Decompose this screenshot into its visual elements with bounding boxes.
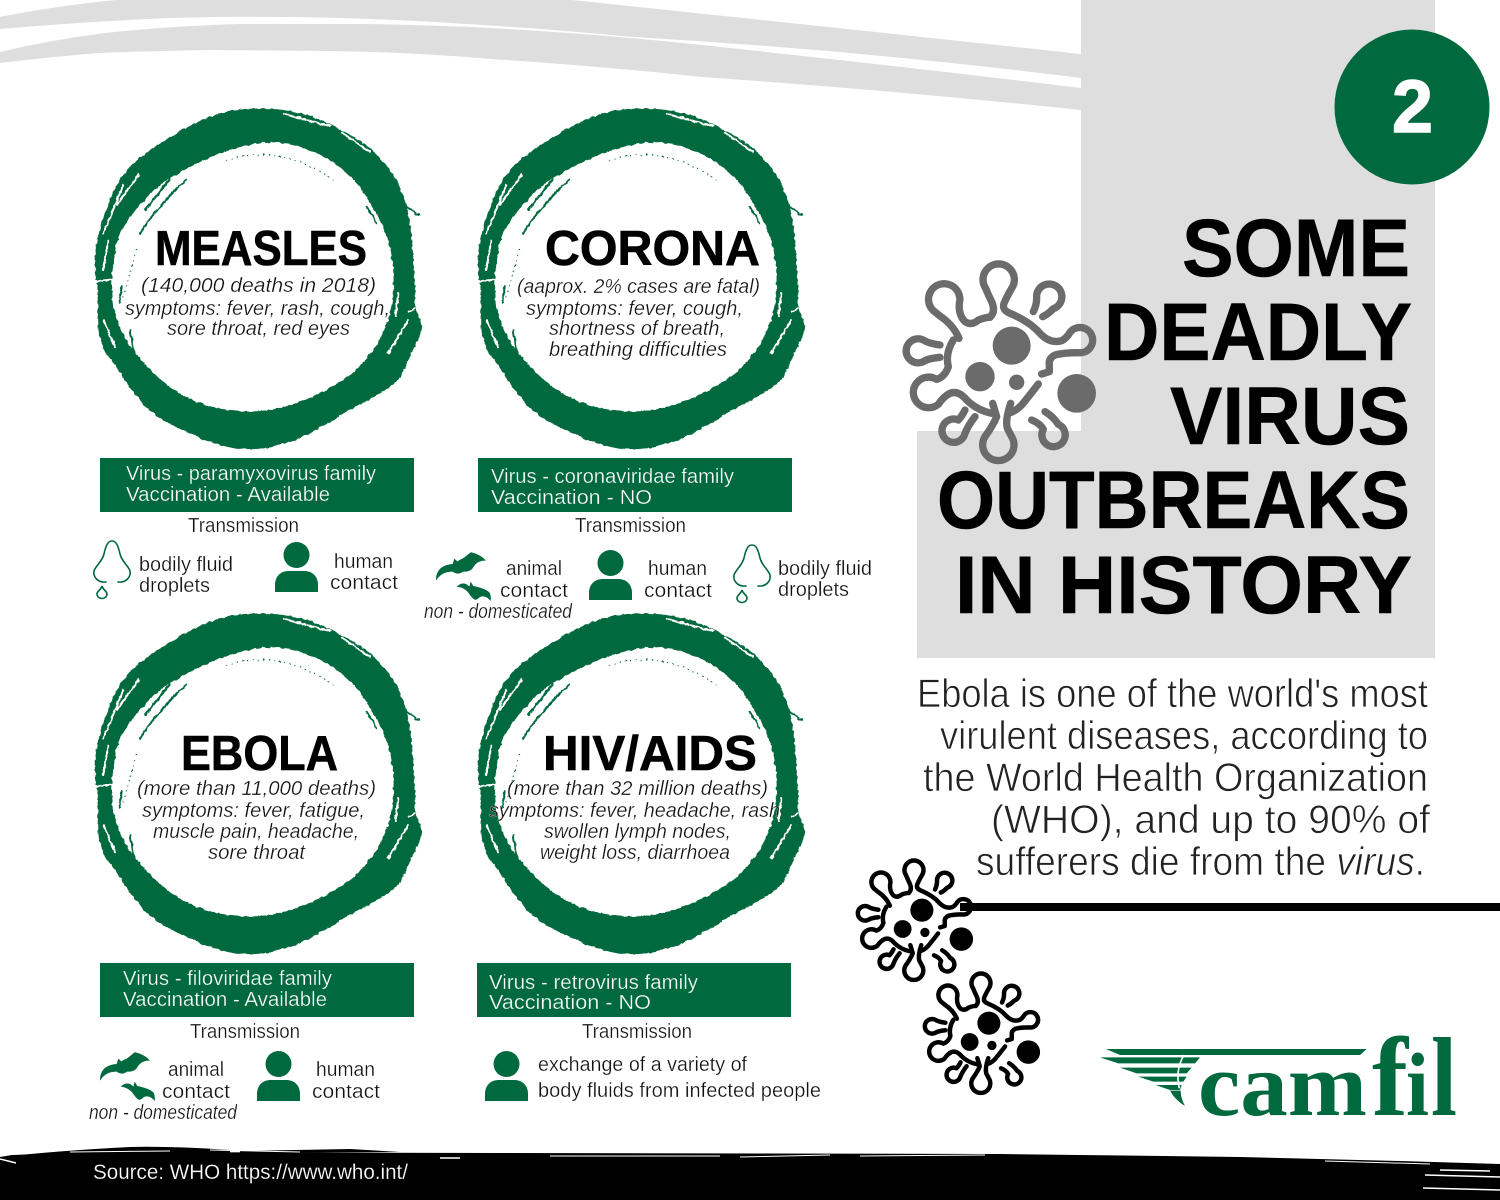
hiv description: weight loss, diarrhoea xyxy=(540,842,730,864)
human contact label xyxy=(312,1059,380,1103)
animal contact label: contact xyxy=(500,580,568,602)
intro paragraph xyxy=(917,672,1431,884)
bodily fluid label xyxy=(778,558,872,601)
measles ring xyxy=(93,110,420,448)
measles virus info bar: Virus - paramyxovirus family xyxy=(126,463,376,485)
bodily fluid label: bodily fluid xyxy=(139,554,233,576)
measles virus info bar xyxy=(100,458,414,512)
animal contact label: non - domesticated xyxy=(89,1102,238,1124)
icon: person xyxy=(275,542,318,592)
hiv virus info bar: Vaccination - NO xyxy=(489,992,651,1014)
body fluids label: exchange of a variety of xyxy=(538,1054,747,1076)
intro paragraph: virulent diseases, according to xyxy=(940,714,1428,758)
corona description: (aaprox. 2% cases are fatal) xyxy=(517,276,760,298)
body fluids label xyxy=(538,1054,821,1102)
animal contact label: animal xyxy=(168,1059,224,1081)
hiv description xyxy=(489,778,780,864)
ebola description: sore throat xyxy=(208,842,306,864)
main title: IN HISTORY xyxy=(955,540,1412,631)
corona transmission label: Transmission xyxy=(575,515,686,537)
hiv virus info bar xyxy=(477,963,791,1017)
icon: small black virus two xyxy=(925,974,1040,1093)
animal contact label: animal xyxy=(506,558,562,580)
icon: nose droplets xyxy=(94,541,130,598)
bodily fluid label: droplets xyxy=(778,579,849,601)
icon: bats xyxy=(100,1052,155,1101)
corona virus info bar: Vaccination - NO xyxy=(491,487,652,509)
corona virus info bar: Virus - coronaviridae family xyxy=(491,466,734,488)
hiv description: swollen lymph nodes, xyxy=(544,821,731,843)
ebola description: (more than 11,000 deaths) xyxy=(137,778,376,800)
human contact label: contact xyxy=(644,580,712,602)
badge: number 2: 2 xyxy=(1392,65,1433,148)
main title: OUTBREAKS xyxy=(937,455,1410,546)
ebola description xyxy=(137,778,376,864)
intro paragraph: sufferers die from the virus. xyxy=(976,840,1425,884)
human contact label: human xyxy=(334,551,393,573)
icon: person xyxy=(257,1051,300,1101)
ebola heading: EBOLA xyxy=(181,727,338,781)
hiv description: (more than 32 million deaths) xyxy=(507,778,768,800)
grey title panel xyxy=(917,0,1435,658)
icon: large grey virus xyxy=(906,264,1096,461)
hiv heading: HIV/AIDS xyxy=(543,727,757,781)
ebola ring xyxy=(93,615,420,953)
corona description: breathing difficulties xyxy=(549,339,727,361)
human contact label: human xyxy=(648,558,707,580)
bodily fluid label: bodily fluid xyxy=(778,558,872,580)
animal contact label: non - domesticated xyxy=(424,601,573,623)
source line: Source: WHO https://www.who.int/ xyxy=(93,1161,408,1184)
animal contact label xyxy=(89,1059,238,1124)
background brush waves xyxy=(0,0,1081,110)
ebola description: muscle pain, headache, xyxy=(153,821,359,843)
icon: bats xyxy=(436,552,491,601)
human contact label xyxy=(330,551,398,594)
ebola virus info bar: Virus - filoviridae family xyxy=(123,968,332,990)
ebola transmission label: Transmission xyxy=(190,1021,300,1043)
human contact label: contact xyxy=(330,572,398,594)
corona description: symptoms: fever, cough, xyxy=(526,298,743,320)
human contact label: contact xyxy=(312,1081,380,1103)
corona description: shortness of breath, xyxy=(549,318,725,340)
rule line xyxy=(960,903,1500,911)
ebola virus info bar: Vaccination - Available xyxy=(123,989,327,1011)
hiv transmission label: Transmission xyxy=(582,1021,692,1043)
logo: camfil xyxy=(1100,1016,1457,1140)
bodily fluid label xyxy=(139,554,233,597)
measles transmission label: Transmission xyxy=(188,515,299,537)
corona ring xyxy=(476,110,803,448)
corona virus info bar xyxy=(478,458,792,512)
measles virus info bar: Vaccination - Available xyxy=(126,484,330,506)
icon: person xyxy=(485,1051,528,1101)
intro paragraph: (WHO), and up to 90% of xyxy=(991,798,1431,842)
corona description xyxy=(517,276,760,361)
ebola virus info bar xyxy=(100,963,414,1017)
animal contact label: contact xyxy=(162,1081,230,1103)
panel: hiv aids xyxy=(476,615,821,1102)
bodily fluid label: droplets xyxy=(139,575,210,597)
ebola description: symptoms: fever, fatigue, xyxy=(142,800,365,822)
measles description: sore throat, red eyes xyxy=(167,318,350,340)
measles heading: MEASLES xyxy=(155,222,367,276)
main title: DEADLY xyxy=(1104,287,1412,378)
hiv ring xyxy=(476,615,803,953)
measles description: symptoms: fever, rash, cough, xyxy=(125,298,390,320)
logo: camfil: cam xyxy=(1198,1036,1367,1135)
main title: SOME xyxy=(1182,203,1410,294)
panel: corona xyxy=(424,110,872,623)
human contact label: human xyxy=(316,1059,375,1081)
icon: small black virus one xyxy=(858,861,973,980)
icon: person xyxy=(589,550,632,600)
intro paragraph: the World Health Organization xyxy=(923,756,1428,800)
intro paragraph: Ebola is one of the world's most xyxy=(917,672,1428,716)
main title xyxy=(937,203,1412,631)
body fluids label: body fluids from infected people xyxy=(538,1080,821,1102)
human contact label xyxy=(644,558,712,602)
panel: measles xyxy=(93,110,420,598)
animal contact label xyxy=(424,558,573,623)
measles description: (140,000 deaths in 2018) xyxy=(141,275,376,297)
measles description xyxy=(125,275,390,340)
main title: VIRUS xyxy=(1170,371,1410,462)
hiv virus info bar: Virus - retrovirus family xyxy=(489,972,698,994)
icon: nose droplets xyxy=(734,545,770,602)
logo: camfil: i xyxy=(1406,1036,1429,1135)
footer brush band xyxy=(0,1147,1500,1200)
logo: camfil: f xyxy=(1372,1016,1409,1140)
corona heading: CORONA xyxy=(545,222,760,276)
hiv description: symptoms: fever, headache, rash xyxy=(489,800,780,822)
logo: camfil: l xyxy=(1431,1016,1457,1140)
panel: ebola xyxy=(89,615,420,1124)
badge: number 2 xyxy=(1334,30,1490,184)
